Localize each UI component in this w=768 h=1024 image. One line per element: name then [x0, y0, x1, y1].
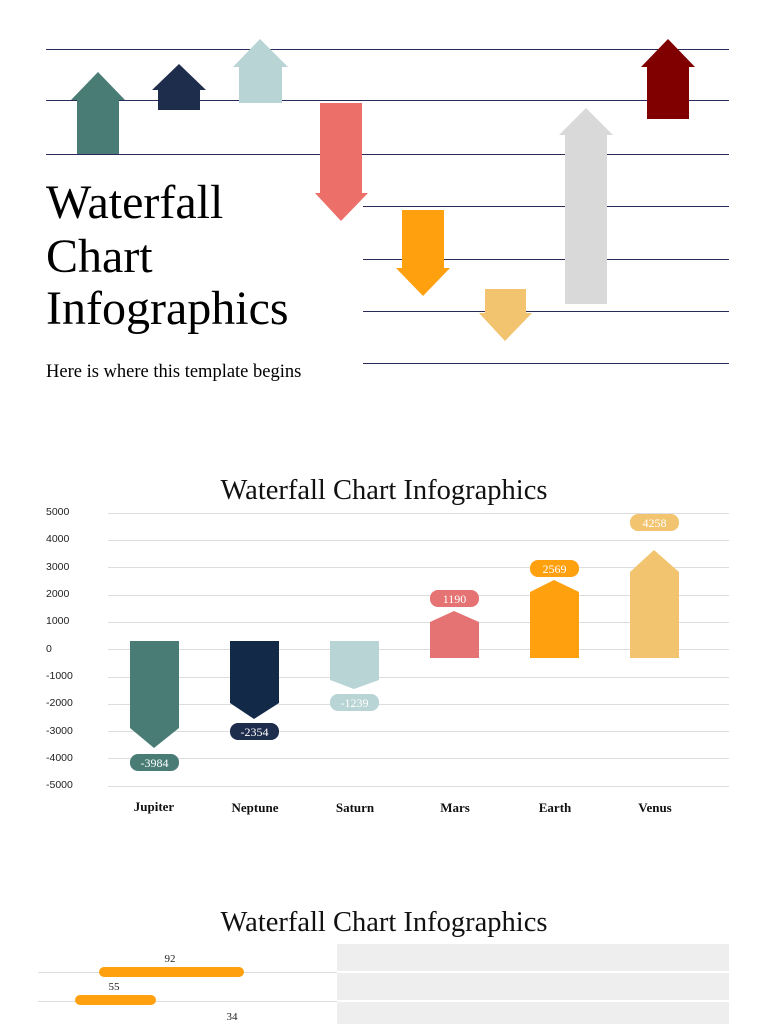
- y axis labels: -1000: [46, 670, 73, 682]
- labels: 55: [108, 981, 120, 993]
- chart 2: [46, 475, 729, 815]
- title: Chart: [46, 230, 153, 283]
- arrow: teal up: [71, 72, 125, 154]
- category labels: [134, 799, 672, 815]
- labels: 34: [226, 1011, 238, 1023]
- bar: Jupiter: -3984: [140, 756, 168, 770]
- bar: Saturn: -1239: [340, 696, 368, 710]
- chart 3 title: Waterfall Chart Infographics: [221, 907, 547, 938]
- y axis labels: 2000: [46, 588, 70, 600]
- bars: [75, 967, 244, 1005]
- bar: Neptune: -2354: [240, 725, 268, 739]
- category labels: Venus: [638, 800, 672, 815]
- y axis labels: 1000: [46, 615, 70, 627]
- bar: Earth: 2569: [542, 562, 566, 576]
- bar: Saturn: [330, 641, 379, 711]
- labels: [108, 953, 238, 1023]
- y axis labels: -2000: [46, 697, 73, 709]
- bars: [130, 514, 679, 771]
- y axis labels: -5000: [46, 779, 73, 791]
- category labels: Jupiter: [134, 799, 174, 814]
- bar: Neptune: [230, 641, 279, 740]
- bar: Venus: [630, 514, 679, 658]
- top grid lines: [46, 50, 729, 364]
- y axis labels: -3000: [46, 725, 73, 737]
- arrow: dark red up: [641, 39, 695, 119]
- bar: Jupiter: [130, 641, 179, 771]
- bar: Mars: 1190: [443, 592, 466, 606]
- y axis labels: -4000: [46, 752, 73, 764]
- y axis labels: 3000: [46, 561, 70, 573]
- title: Waterfall: [46, 176, 223, 229]
- y axis labels: 5000: [46, 506, 70, 518]
- arrow: gray up: [559, 108, 613, 304]
- arrow: light orange down: [479, 289, 532, 341]
- category labels: Saturn: [336, 800, 375, 815]
- subtitle: Here is where this template begins: [46, 362, 301, 382]
- top arrows: [71, 39, 695, 341]
- labels: 92: [164, 953, 176, 965]
- bar: Mars: [430, 590, 479, 658]
- category labels: Mars: [440, 800, 470, 815]
- chart 2 title: Waterfall Chart Infographics: [221, 475, 547, 506]
- bar: Earth: [530, 560, 579, 658]
- arrow: salmon down: [315, 103, 368, 221]
- arrow: light blue up: [233, 39, 288, 103]
- bar: Venus: 4258: [642, 516, 666, 530]
- y axis labels: 0: [46, 643, 52, 655]
- y axis labels: [46, 506, 73, 791]
- chart 3: [38, 907, 729, 1024]
- y axis labels: 4000: [46, 533, 70, 545]
- arrow: orange down: [396, 210, 450, 296]
- title: Infographics: [46, 282, 289, 335]
- gray panel: [337, 944, 729, 1024]
- category labels: Earth: [539, 800, 572, 815]
- category labels: Neptune: [232, 800, 279, 815]
- arrow: navy up: [152, 64, 206, 110]
